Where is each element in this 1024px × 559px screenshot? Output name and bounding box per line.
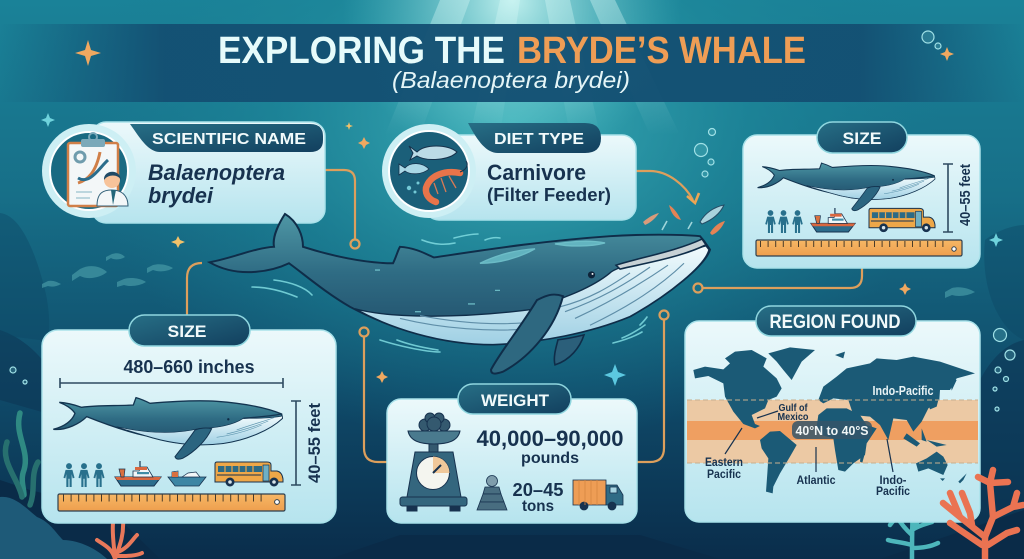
height label: 40–55 feet: [957, 164, 974, 226]
card: [425, 135, 636, 220]
weight panel: [387, 384, 637, 523]
header: DIET TYPE: [494, 131, 584, 148]
icon: truck: [573, 480, 623, 510]
header: [756, 306, 916, 336]
diet type panel: [382, 123, 636, 220]
label: latitude range: 40°N to 40°S: [796, 423, 869, 438]
title: EXPLORING THE: [218, 30, 505, 72]
coral right: [943, 470, 1023, 559]
length bar: [60, 378, 283, 388]
header: [468, 123, 601, 153]
seaweed: [5, 413, 38, 505]
title banner: [0, 24, 1024, 102]
weight unit: pounds: [521, 450, 579, 467]
people: [765, 210, 803, 233]
name: brydei: [148, 183, 214, 208]
main whale: [210, 214, 710, 374]
card: [685, 321, 980, 522]
eye: [588, 271, 595, 278]
label: indo-pacific south: Indo-: [880, 475, 907, 487]
whale belly: [355, 246, 709, 345]
header: SIZE: [842, 129, 882, 148]
label: atlantic: Atlantic: [796, 475, 836, 487]
connector lines: [187, 170, 862, 462]
coral teal: [888, 507, 938, 559]
label: gulf of mexico: Gulf of: [778, 403, 808, 414]
title: BRYDE’S WHALE: [517, 30, 806, 72]
label: gulf of mexico: [757, 403, 808, 423]
decorative bubbles: [10, 31, 1015, 411]
baleen: [616, 239, 706, 269]
dorsal highlights: [375, 241, 605, 312]
size panel right: [743, 122, 980, 268]
krill: [643, 205, 725, 235]
label: indo-pacific south: Pacific: [876, 486, 911, 498]
label: atlantic: [796, 447, 836, 487]
arrow to krill: [687, 193, 699, 203]
height bar: [291, 401, 301, 485]
pectoral flipper: [491, 295, 563, 374]
height label: 40–55 feet: [305, 403, 324, 483]
card: [42, 330, 336, 523]
label: eastern pacific: [705, 428, 743, 481]
subtitle: (Balaenoptera brydei): [392, 67, 630, 93]
ruler: [756, 240, 962, 256]
height bar: [943, 164, 953, 232]
title: [218, 30, 806, 72]
weight value: 40,000–90,000: [476, 426, 624, 451]
header: [458, 384, 571, 414]
name: [148, 160, 285, 208]
bus: [215, 462, 283, 486]
icon: scale: [400, 413, 467, 511]
whale: [53, 398, 282, 459]
label: eastern pacific: Eastern: [705, 457, 743, 469]
card: [92, 122, 325, 223]
icon: fish and shrimp: [382, 124, 476, 218]
icon: weight stack: [477, 476, 507, 510]
boat: [811, 208, 855, 232]
header: [130, 124, 323, 152]
diet text: Carnivore: [487, 160, 586, 185]
length label: 480–660 inches: [124, 357, 254, 377]
ruler: [58, 494, 285, 511]
band limits: [687, 400, 978, 463]
size panel left: [42, 315, 336, 523]
header: [129, 315, 250, 346]
scientific name panel: [42, 122, 325, 223]
bus: [869, 208, 935, 232]
latitude bands: [687, 400, 978, 463]
header: REGION FOUND: [770, 312, 900, 333]
icon: clipboard, dna and scientist: [42, 124, 136, 218]
coral left: [97, 520, 142, 559]
rock bottom left: [0, 497, 107, 559]
water swirls: [252, 234, 647, 352]
card: [743, 135, 980, 268]
label: eastern pacific: Pacific: [707, 469, 742, 481]
world map: [693, 347, 975, 493]
region found panel: [685, 306, 980, 522]
label: indo-pacific north: Indo-Pacific: [872, 384, 934, 398]
whale: [758, 163, 935, 211]
card: [387, 399, 637, 523]
header: WEIGHT: [481, 391, 550, 410]
boat: [115, 461, 161, 486]
tons value: 20–45: [512, 480, 564, 500]
header: [817, 122, 907, 153]
speedboat: [168, 471, 206, 486]
label: gulf of mexico: Mexico: [778, 412, 808, 423]
rear flipper: [554, 335, 584, 365]
throat pleats: [400, 263, 684, 330]
header: SCIENTIFIC NAME: [152, 131, 306, 148]
distant fish: [42, 253, 975, 298]
name: Balaenoptera: [148, 160, 285, 185]
label: indo-pacific south: [876, 439, 911, 498]
diet text: (Filter Feeder): [487, 185, 611, 205]
sparkles: [41, 40, 1003, 386]
tons unit: tons: [522, 498, 554, 515]
whale body: [210, 214, 710, 345]
diet text: [487, 160, 611, 205]
header: SIZE: [168, 322, 206, 341]
people: [63, 463, 105, 487]
